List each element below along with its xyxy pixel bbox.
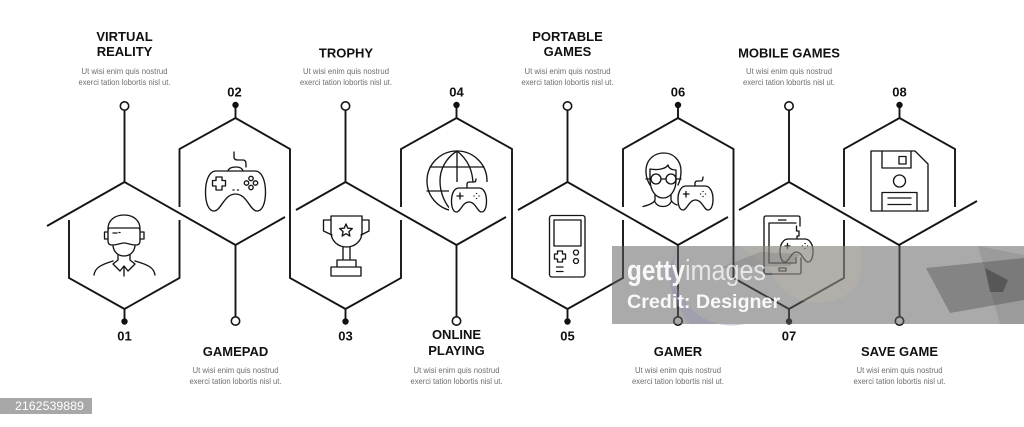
description 06: exerci tation lobortis nisl ut. — [632, 377, 724, 386]
number node 08: 08 — [892, 84, 907, 100]
connector with open node 06 — [674, 245, 682, 325]
description 08: Ut wisi enim quis nostrud — [856, 366, 942, 375]
description 01: exerci tation lobortis nisl ut. — [78, 78, 170, 87]
step 02: gamepad — [180, 84, 401, 386]
icon: handheld console — [550, 216, 585, 277]
description 01 — [78, 67, 170, 87]
number node 01 — [117, 309, 132, 344]
step 07: mobile games — [738, 46, 977, 344]
number node 08 — [892, 84, 907, 118]
description 04 — [410, 366, 502, 386]
icon: gamer with gamepad — [643, 153, 713, 210]
description 06: Ut wisi enim quis nostrud — [635, 366, 721, 375]
description 02: exerci tation lobortis nisl ut. — [190, 377, 282, 386]
description 07: exerci tation lobortis nisl ut. — [743, 78, 835, 87]
number node 04 — [449, 84, 464, 118]
connector with open node 05 — [563, 102, 572, 182]
step 06: gamer — [623, 84, 844, 386]
step 04: online playing — [401, 84, 623, 386]
connector with open node 04 — [452, 245, 461, 325]
description 05 — [522, 67, 614, 87]
step 08: save game — [844, 84, 955, 386]
icon: floppy disk — [871, 151, 928, 211]
description 07 — [743, 67, 835, 87]
hexagon outline 05 — [518, 182, 728, 245]
description 03: Ut wisi enim quis nostrud — [303, 67, 389, 76]
title: virtual reality: VIRTUAL — [96, 29, 153, 44]
image id tag: 2162539889 — [15, 399, 84, 413]
number node 02: 02 — [227, 84, 242, 100]
icon: smartphone with gamepad — [764, 216, 813, 274]
hexagon outline 01 — [47, 182, 285, 309]
icon: trophy — [324, 216, 369, 276]
number node 03: 03 — [338, 328, 353, 344]
description 07: Ut wisi enim quis nostrud — [746, 67, 832, 76]
hexagon outline 06 — [623, 118, 844, 309]
number node 07 — [782, 309, 796, 344]
description 08: exerci tation lobortis nisl ut. — [854, 377, 946, 386]
connector with open node 02 — [231, 245, 240, 325]
number node 06: 06 — [671, 84, 685, 100]
title: online playing: PLAYING — [428, 343, 485, 358]
description 01: Ut wisi enim quis nostrud — [82, 67, 168, 76]
description 05: exerci tation lobortis nisl ut. — [522, 78, 614, 87]
title: gamepad: GAMEPAD — [203, 344, 268, 359]
description 03: exerci tation lobortis nisl ut. — [300, 78, 392, 87]
title: trophy: TROPHY — [319, 46, 373, 60]
description 04: exerci tation lobortis nisl ut. — [410, 377, 502, 386]
hexagon outline 07 — [739, 182, 977, 245]
title: portable games: GAMES — [544, 44, 592, 59]
watermark logo text: images — [685, 255, 766, 287]
step 01: virtual reality — [47, 29, 285, 344]
title: online playing: ONLINE — [432, 327, 481, 342]
description 03 — [300, 67, 392, 87]
watermark credit: Credit: Designer — [627, 291, 780, 313]
title: gamer: GAMER — [654, 344, 703, 359]
image id tag — [0, 398, 92, 414]
step 05: portable games — [518, 29, 728, 344]
description 02: Ut wisi enim quis nostrud — [192, 366, 278, 375]
title: portable games: PORTABLE — [532, 29, 603, 44]
number node 05 — [560, 309, 575, 344]
icon: gamepad — [206, 152, 266, 211]
icon: vr headset user — [94, 215, 155, 276]
watermark banner — [612, 246, 1024, 326]
description 04: Ut wisi enim quis nostrud — [414, 366, 500, 375]
hexagon outline 08 — [844, 118, 955, 207]
step 03: trophy — [296, 46, 506, 344]
connector with open node 03 — [341, 102, 350, 182]
number node 05: 05 — [560, 328, 575, 344]
connector with open node 01 — [120, 102, 129, 182]
number node 07: 07 — [782, 328, 796, 344]
number node 03 — [338, 309, 353, 344]
watermark logo text: getty — [627, 255, 685, 287]
icon: globe with gamepad — [427, 151, 489, 212]
description 05: Ut wisi enim quis nostrud — [524, 67, 610, 76]
number node 06 — [671, 84, 685, 118]
title: save game: SAVE GAME — [861, 344, 938, 359]
hexagon outline 04 — [401, 118, 623, 309]
description 08 — [854, 366, 946, 386]
title: virtual reality: REALITY — [97, 44, 153, 59]
watermark logo text — [627, 255, 766, 287]
title: mobile games: MOBILE GAMES — [738, 46, 840, 60]
hexagon outline 02 — [180, 118, 401, 309]
description 06 — [632, 366, 724, 386]
number node 02 — [227, 84, 242, 118]
number node 01: 01 — [117, 328, 132, 344]
hexagon outline 03 — [296, 182, 506, 245]
description 02 — [190, 366, 282, 386]
connector with open node 07 — [785, 102, 793, 182]
connector with open node 08 — [895, 245, 904, 325]
number node 04: 04 — [449, 84, 464, 100]
